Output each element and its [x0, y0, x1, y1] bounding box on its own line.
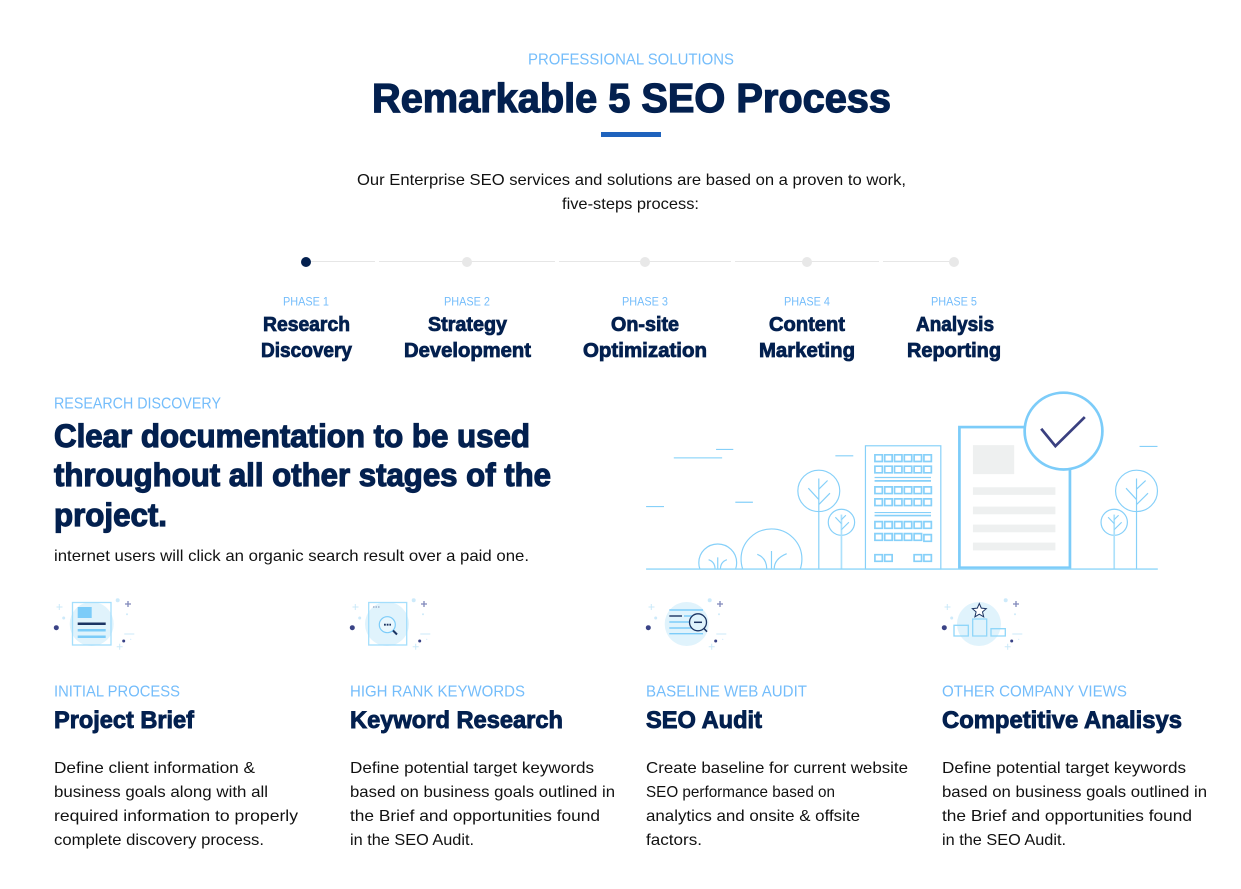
card title: Project Brief — [54, 707, 195, 734]
phase 4 label — [759, 294, 855, 362]
shrubs — [698, 528, 802, 568]
phase 5 label — [907, 294, 1001, 362]
card text: the Brief and opportunities found — [350, 808, 600, 825]
phase 5 marker — [949, 257, 959, 267]
phase 4 label: Content — [769, 314, 845, 336]
card title: SEO Audit — [646, 707, 762, 734]
tree, large left — [798, 470, 840, 569]
title underline — [601, 132, 661, 137]
card text: Define potential target keywords — [942, 760, 1186, 777]
column: seo audit — [646, 598, 908, 849]
card text: in the SEO Audit. — [942, 832, 1066, 849]
eyebrow: INITIAL PROCESS — [54, 684, 180, 700]
card text: Create baseline for current website — [646, 760, 908, 777]
document — [959, 427, 1070, 568]
card text — [350, 760, 615, 849]
phase 1 label: PHASE 1 — [283, 294, 329, 308]
phase 1 label: Research — [263, 314, 350, 336]
page header — [357, 52, 906, 213]
section heading — [54, 418, 551, 533]
phase 2 label: Strategy — [428, 314, 508, 336]
phase 3 label — [583, 294, 707, 362]
phase 3 marker — [640, 257, 650, 267]
phase 1 marker — [301, 257, 311, 267]
ground line — [646, 567, 1158, 571]
card text: complete discovery process. — [54, 832, 264, 849]
icon: document — [54, 598, 134, 650]
phase 5 label: PHASE 5 — [931, 294, 977, 308]
tree, small left — [828, 509, 855, 569]
phase 4 label: PHASE 4 — [784, 294, 830, 308]
section paragraph: internet users will click an organic search result over a paid one. — [54, 548, 529, 565]
title: Remarkable 5 SEO Process — [372, 75, 891, 121]
eyebrow: professional solutions: PROFESSIONAL SOLUTIONS — [528, 52, 734, 68]
phase 4 label: Marketing — [759, 340, 855, 362]
intro text: five-steps process: — [562, 196, 699, 213]
icon: text lines with magnifier — [646, 598, 726, 650]
section heading: throughout all other stages of the — [54, 457, 551, 493]
tree, large right — [1116, 470, 1157, 569]
card text: the Brief and opportunities found — [942, 808, 1192, 825]
phase 3 label: PHASE 3 — [622, 294, 668, 308]
phase 4 marker — [802, 257, 812, 267]
card text — [942, 760, 1207, 849]
eyebrow: BASELINE WEB AUDIT — [646, 684, 807, 700]
card text: SEO performance based on — [646, 784, 835, 801]
phase 2 label: PHASE 2 — [444, 294, 490, 308]
intro text: Our Enterprise SEO services and solutions are based on a proven to work, — [357, 172, 906, 189]
icon: magnifier on document — [350, 598, 430, 650]
phase 1 label: Discovery — [261, 340, 353, 362]
card text: in the SEO Audit. — [350, 832, 474, 849]
tree, small right — [1101, 509, 1127, 569]
phase 3 label: On-site — [611, 314, 679, 336]
eyebrow: HIGH RANK KEYWORDS — [350, 684, 525, 700]
card text: based on business goals outlined in — [942, 784, 1207, 801]
eyebrow: OTHER COMPANY VIEWS — [942, 684, 1127, 700]
phase 2 marker — [462, 257, 472, 267]
research discovery text block — [54, 396, 551, 565]
card text: Define potential target keywords — [350, 760, 594, 777]
card text: factors. — [646, 832, 702, 849]
section eyebrow: RESEARCH DISCOVERY — [54, 396, 221, 412]
phase 5 label: Reporting — [907, 340, 1001, 362]
phase 1 label — [261, 294, 353, 362]
illustration: city and approved document — [646, 393, 1158, 589]
phase 2 label: Development — [404, 340, 531, 362]
office building — [865, 446, 941, 569]
phase 3 label: Optimization — [583, 340, 707, 362]
phase 5 label: Analysis — [916, 314, 994, 336]
card text: Define client information & — [54, 760, 255, 777]
card text: business goals along with all — [54, 784, 268, 801]
card text: analytics and onsite & offsite — [646, 808, 860, 825]
card text — [54, 760, 298, 849]
check badge — [1025, 393, 1102, 470]
card text — [646, 760, 908, 849]
card title: Keyword Research — [350, 707, 563, 734]
card text: based on business goals outlined in — [350, 784, 615, 801]
column: competitive analysis — [942, 598, 1207, 849]
card text: required information to properly — [54, 808, 298, 825]
phase 2 label — [404, 294, 531, 362]
intro text — [357, 172, 906, 213]
icon: podium with star — [942, 598, 1022, 650]
column: project brief — [54, 598, 298, 849]
card title: Competitive Analisys — [942, 707, 1182, 734]
column: keyword research — [350, 598, 615, 849]
phase timeline — [301, 257, 959, 267]
section heading: Clear documentation to be used — [54, 418, 530, 454]
section heading: project. — [54, 497, 167, 533]
